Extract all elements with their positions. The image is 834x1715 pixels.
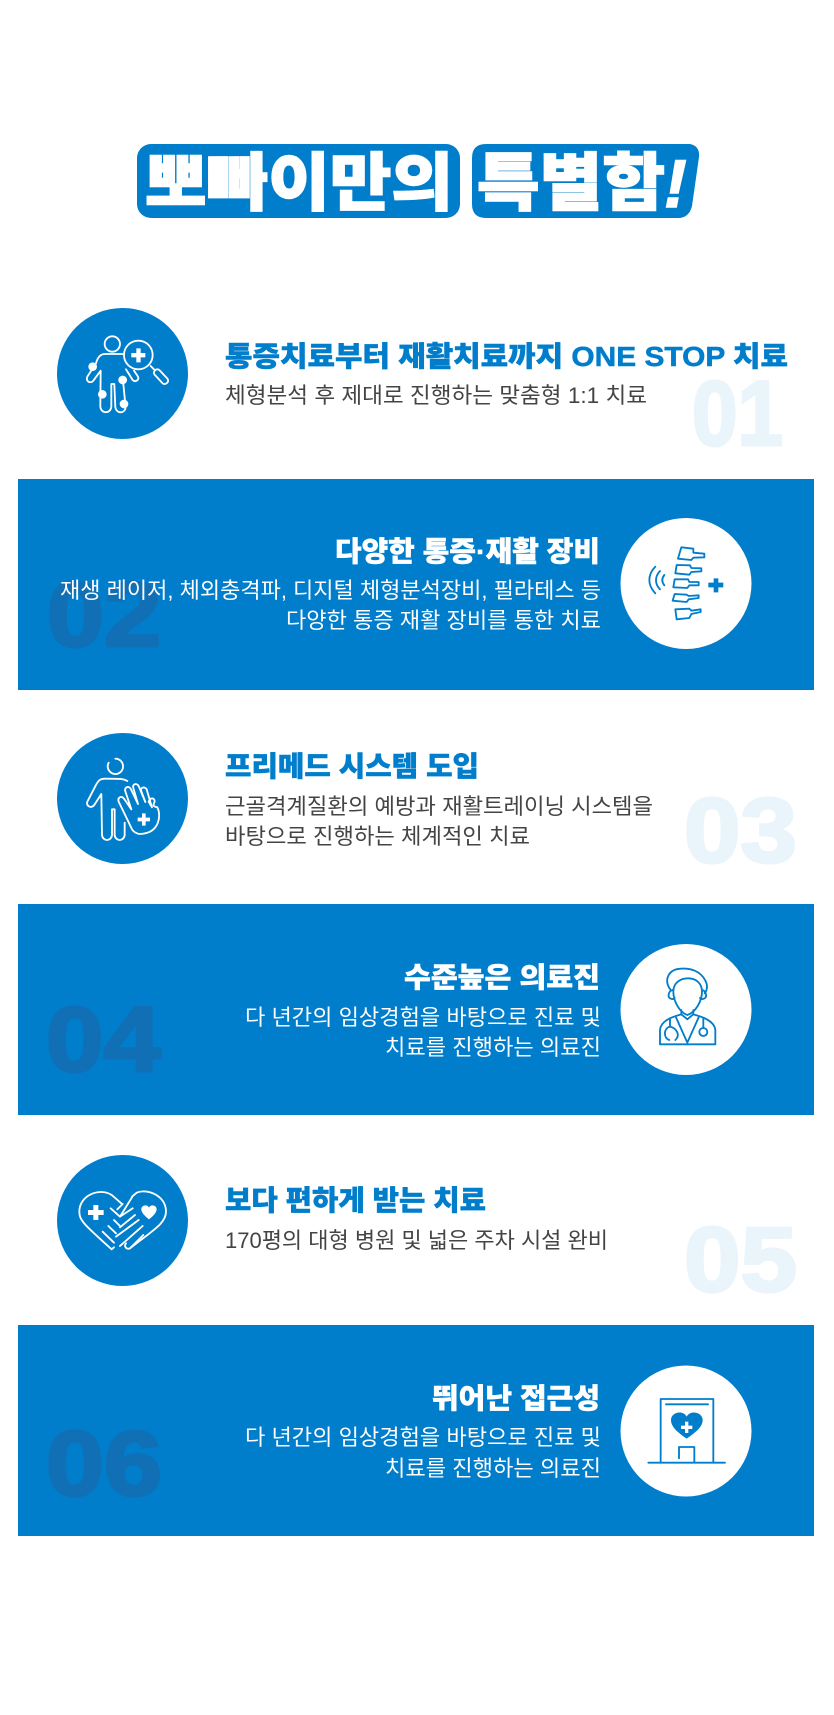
number 05: 05 <box>684 1209 797 1311</box>
icon: body check circle <box>57 308 188 439</box>
panel: 04 medical staff <box>18 904 814 1115</box>
icon: spine circle <box>620 518 752 649</box>
title: ! <box>664 146 687 222</box>
heading: 뛰어난 접근성 <box>432 1383 600 1414</box>
heading: 프리메드 시스템 도입 <box>225 751 479 782</box>
heading: 수준높은 의료진 <box>404 962 600 993</box>
heading: 통증치료부터 재활치료까지 ONE STOP 치료 <box>225 341 788 372</box>
description: 근골격계질환의 예방과 재활트레이닝 시스템을 <box>225 794 653 819</box>
description <box>245 1005 601 1060</box>
description: 다 년간의 임상경험을 바탕으로 진료 및 <box>245 1005 601 1030</box>
heading: 다양한 통증·재활 장비 <box>335 536 600 567</box>
band <box>18 904 814 1115</box>
panel: 05 comfortable care <box>57 1155 797 1311</box>
description <box>245 1425 601 1481</box>
number 06: 06 <box>46 1413 162 1515</box>
number 03: 03 <box>684 780 797 882</box>
number 04: 04 <box>46 989 161 1091</box>
description: 체형분석 후 제대로 진행하는 맞춤형 1:1 치료 <box>225 383 647 408</box>
panel: 03 premed system <box>57 733 797 882</box>
number 02: 02 <box>47 564 161 666</box>
title: 특별함 <box>477 149 665 219</box>
title <box>137 144 699 222</box>
icon: heart hands circle <box>57 1155 188 1286</box>
description <box>60 578 601 633</box>
panel: 06 accessibility <box>18 1325 814 1536</box>
description: 다양한 통증 재활 장비를 통한 치료 <box>286 608 601 633</box>
icon: hospital circle <box>620 1366 752 1496</box>
description <box>225 794 653 849</box>
number 01: 01 <box>692 363 783 465</box>
icon: doctor circle <box>620 944 752 1075</box>
band <box>18 479 814 690</box>
description: 다 년간의 임상경험을 바탕으로 진료 및 <box>245 1425 601 1450</box>
panel: 02 equipment <box>18 479 814 690</box>
icon: person and hand circle <box>57 733 188 864</box>
band <box>18 1325 814 1536</box>
title: 뽀빠이만의 <box>145 149 453 219</box>
panel: 01 one stop treatment <box>57 308 788 465</box>
description: 치료를 진행하는 의료진 <box>385 1456 601 1481</box>
description: 치료를 진행하는 의료진 <box>385 1035 601 1060</box>
description: 170평의 대형 병원 및 넓은 주차 시설 완비 <box>225 1228 608 1253</box>
heading: 보다 편하게 받는 치료 <box>225 1185 486 1216</box>
description: 바탕으로 진행하는 체계적인 치료 <box>225 824 530 849</box>
description: 재생 레이저, 체외충격파, 디지털 체형분석장비, 필라테스 등 <box>60 578 601 603</box>
